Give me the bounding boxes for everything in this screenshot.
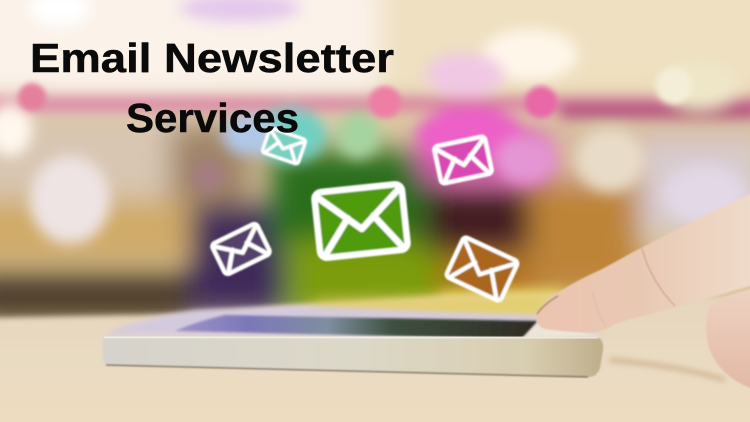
title line 2: Services [126, 95, 299, 141]
icon: orange envelope [446, 236, 518, 302]
icon: large green envelope [314, 184, 408, 258]
icon: white envelope upper left [262, 128, 306, 164]
phone screen [175, 315, 538, 339]
hand: index finger [536, 190, 750, 332]
title line 1: Email Newsletter [30, 35, 394, 81]
phone side edge [103, 336, 603, 377]
title [30, 35, 394, 141]
phone top face [105, 306, 603, 336]
table surface [0, 291, 750, 422]
hand: curled finger [706, 286, 750, 392]
icon: purple envelope [211, 223, 271, 275]
smartphone [103, 306, 603, 377]
icon: pink envelope [434, 136, 492, 184]
